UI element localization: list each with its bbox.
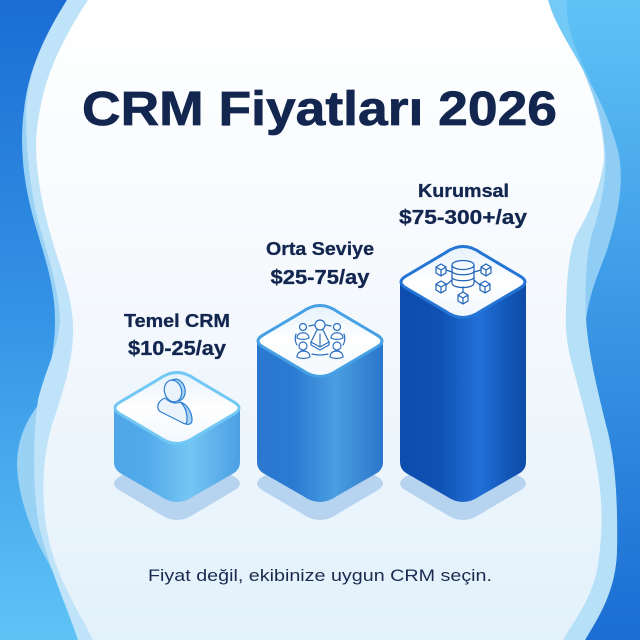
icon: database with connected cubes <box>436 260 491 304</box>
background: light wave left, outer <box>17 0 320 640</box>
bar side: Temel CRM <box>114 408 240 502</box>
background: faint top-right wave <box>548 0 590 80</box>
icon: person <box>158 377 192 424</box>
price: Kurumsal: $75-300+/ay <box>399 207 528 229</box>
label: Temel CRM: Temel CRM <box>124 311 230 331</box>
background: left blue side <box>0 0 320 640</box>
bar: Kurumsal <box>399 181 528 519</box>
title: CRM Fiyatları 2026 <box>82 83 557 136</box>
background: right wave, lower <box>320 0 617 640</box>
label: Kurumsal: Kurumsal <box>418 181 509 201</box>
price: Orta Seviye: $25-75/ay <box>270 267 370 289</box>
background: light wave left, inner <box>26 0 320 640</box>
background: right wave, upper <box>320 0 621 640</box>
footer tagline: Fiyat değil, ekibinize uygun CRM seçin. <box>148 567 492 585</box>
bar shadow: Kurumsal <box>401 448 525 519</box>
bar shadow: Orta Seviye <box>258 448 382 519</box>
bar shadow: Temel CRM <box>115 448 239 519</box>
background: right blue side <box>320 0 640 640</box>
bar top: Orta Seviye <box>258 306 382 376</box>
icon: team around a table <box>295 320 345 358</box>
bar top: Temel CRM <box>115 372 239 444</box>
bar top: Kurumsal <box>401 246 525 318</box>
label: Orta Seviye: Orta Seviye <box>266 239 374 259</box>
bar: Temel CRM <box>114 311 240 519</box>
price: Temel CRM: $10-25/ay <box>128 338 227 360</box>
bar: Orta Seviye <box>257 239 383 519</box>
bar side: Orta Seviye <box>257 341 383 502</box>
bar side: Kurumsal <box>400 282 526 502</box>
